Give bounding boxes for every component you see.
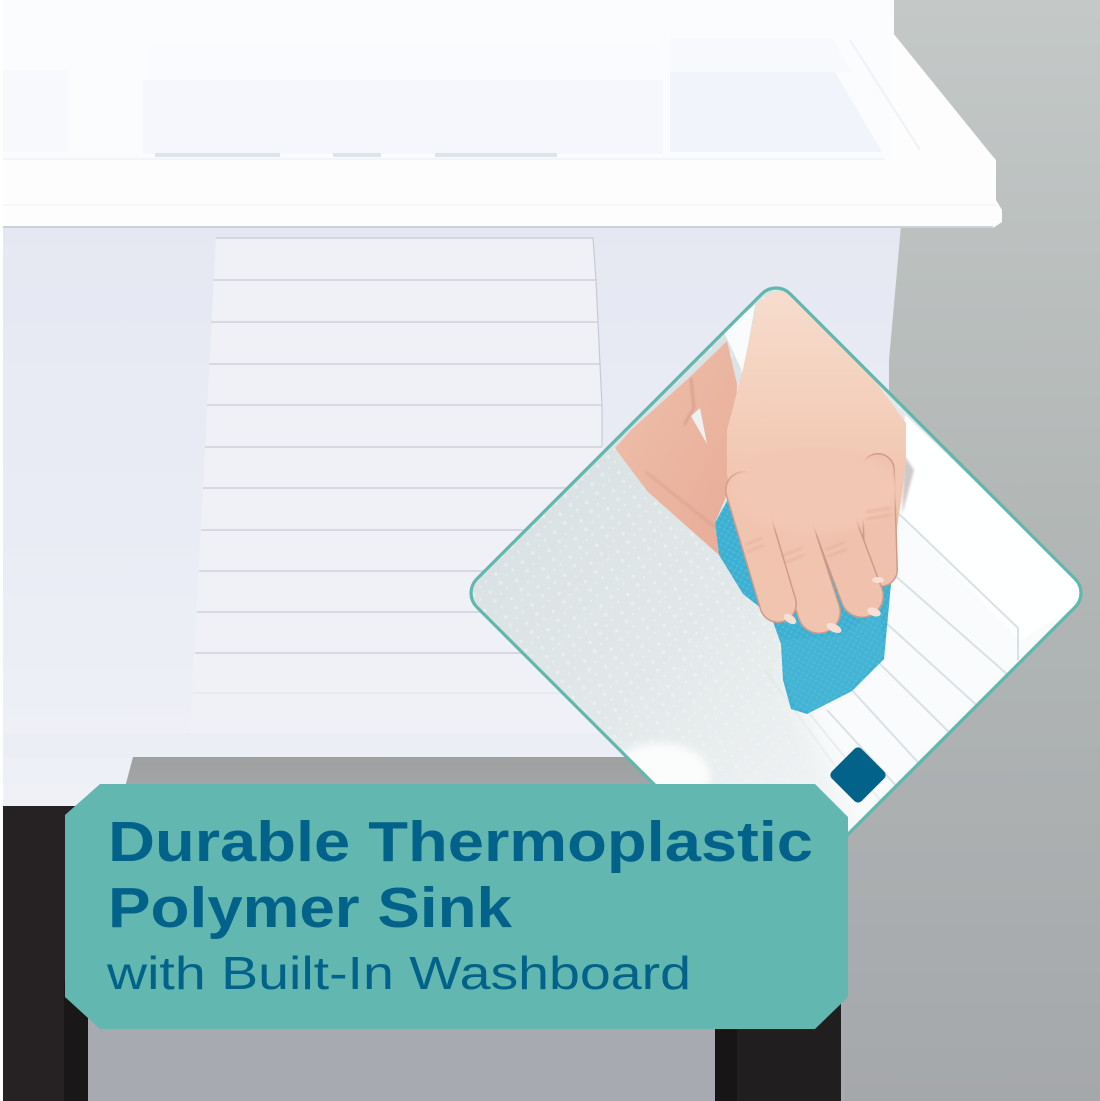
sink surface in inset bbox=[472, 290, 1069, 832]
right hand bbox=[727, 291, 906, 635]
washboard panel bbox=[190, 238, 603, 733]
blue towel bbox=[715, 500, 891, 714]
middle finger bbox=[783, 500, 819, 612]
photo inset: hands wiping sink with towel bbox=[469, 286, 1082, 836]
back of hand bbox=[727, 291, 906, 560]
subheading: with Built-In Washboard bbox=[106, 947, 691, 999]
towel dark fold bbox=[701, 444, 723, 472]
left sink leg bbox=[3, 806, 88, 1101]
title banner bbox=[65, 784, 848, 1029]
right sink leg bbox=[715, 990, 841, 1101]
small blue diamond marker bbox=[828, 745, 888, 805]
left hand bbox=[615, 341, 737, 555]
inset teal border bbox=[463, 280, 1089, 906]
sink basin interior bbox=[3, 0, 894, 165]
space under the sink bbox=[85, 757, 845, 1101]
heading line 1: Durable Thermoplastic bbox=[108, 810, 813, 874]
little finger bbox=[878, 470, 881, 570]
heading line 2: Polymer Sink bbox=[108, 876, 512, 940]
washboard and rim area in inset bbox=[724, 305, 1080, 798]
shadow beside hand bbox=[902, 455, 914, 515]
ring finger bbox=[826, 500, 862, 596]
washboard ribs in inset bbox=[795, 512, 1019, 800]
nails bbox=[784, 614, 796, 624]
knuckle creases bbox=[745, 508, 890, 563]
knuckle blending bbox=[731, 448, 899, 532]
washboard ribs bbox=[193, 238, 602, 693]
index finger bbox=[744, 490, 778, 604]
sink rim bbox=[3, 33, 1002, 228]
